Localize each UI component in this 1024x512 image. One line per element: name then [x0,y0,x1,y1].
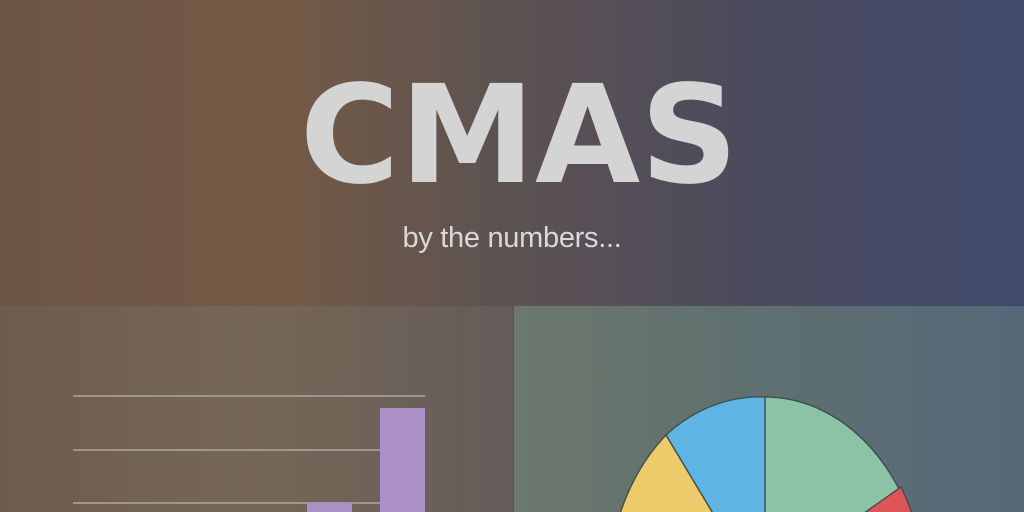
bar chart [73,395,425,512]
pie chart [620,396,912,512]
title: CMAS [300,57,738,215]
panel: pie chart [514,306,1024,512]
subtitle: by the numbers... [403,222,621,254]
panel: bar chart [0,306,513,512]
